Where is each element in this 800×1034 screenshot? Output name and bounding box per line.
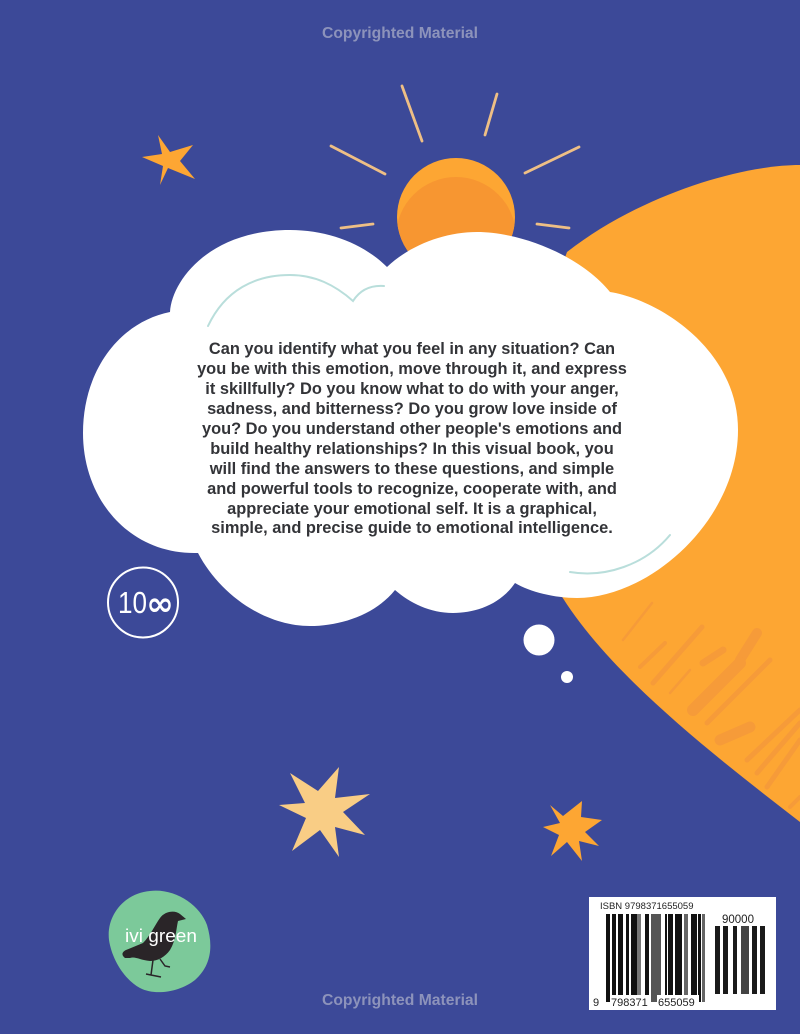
icon: star top left — [142, 135, 195, 185]
barcode digits: 798371 — [611, 997, 648, 1009]
body text: you? Do you understand other people's emotions and — [202, 420, 622, 438]
barcode digits — [593, 995, 699, 1009]
ivi green logo — [109, 891, 210, 992]
body text: build healthy relationships? In this visual book, you — [210, 440, 614, 458]
logo wordmark: ivi green — [125, 926, 197, 946]
bird — [122, 912, 186, 977]
icon: pale seven-point star — [279, 767, 370, 857]
thought bubble large — [524, 624, 554, 656]
large orange planet — [550, 165, 800, 822]
icon: small sun — [397, 158, 515, 252]
body text: appreciate your emotional self. It is a graphical, — [227, 500, 597, 518]
watermark bottom: Copyrighted Material — [322, 992, 478, 1009]
planet texture strokes — [623, 603, 800, 807]
cloud highlight top — [208, 275, 384, 326]
barcode — [589, 897, 776, 1010]
publisher logo 10 infinity: ∞ — [146, 584, 174, 623]
cloud highlight bottom — [570, 535, 670, 573]
barcode digits: 9 — [593, 997, 599, 1009]
body text: and powerful tools to recognize, cooperate with, and — [207, 480, 617, 498]
barcode digits: 655059 — [658, 997, 695, 1009]
publisher logo 10 infinity — [108, 568, 178, 638]
watermark top: Copyrighted Material — [322, 25, 478, 42]
body text — [197, 340, 627, 537]
thought bubble small — [561, 671, 573, 683]
body text: it skillfully? Do you know what to do with your anger, — [205, 380, 619, 398]
icon: orange small star — [543, 801, 602, 861]
body text: sadness, and bitterness? Do you grow love inside of — [207, 400, 617, 418]
main bars — [606, 914, 705, 1002]
icon: sun rays — [331, 86, 579, 228]
add-on number: 90000 — [722, 914, 754, 926]
body text: you be with this emotion, move through it, and express — [197, 360, 627, 378]
publisher logo 10 infinity: 10 — [118, 585, 147, 620]
body text: Can you identify what you feel in any situation? Can — [209, 340, 615, 358]
body text: simple, and precise guide to emotional intelligence. — [211, 519, 613, 537]
thought cloud — [83, 230, 738, 626]
body text: will find the answers to these questions, and simple — [209, 460, 614, 478]
add-on bars — [715, 926, 765, 994]
ISBN text: ISBN 9798371655059 — [600, 901, 694, 912]
